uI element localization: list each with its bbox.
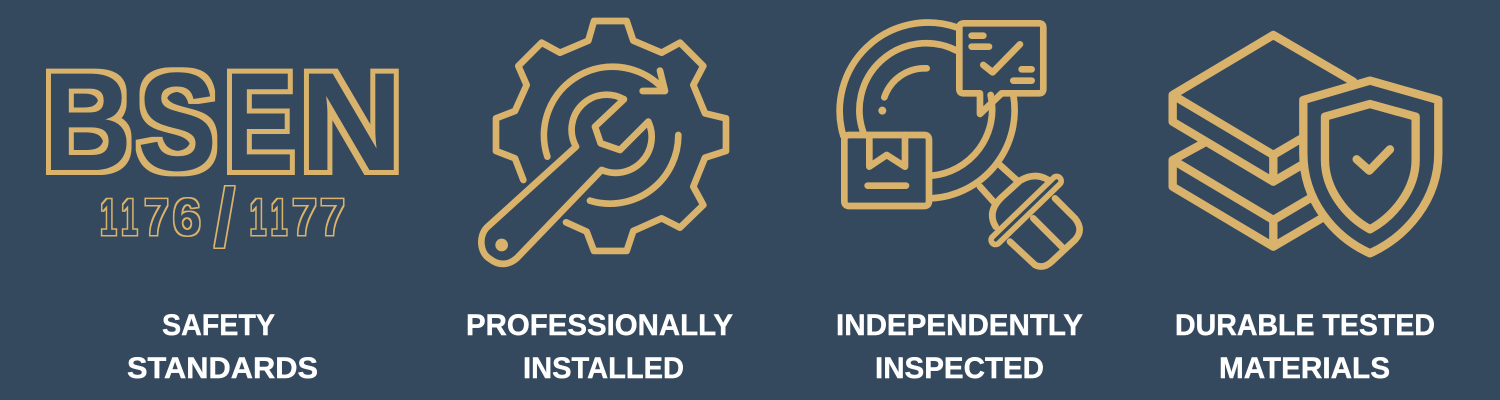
label: safety standards	[127, 309, 318, 385]
heading: BSEN: S	[137, 43, 217, 200]
heading: 1176 / 1177: 7	[320, 189, 345, 247]
top slab	[1173, 35, 1353, 182]
heading: 1176 / 1177: 7	[144, 189, 169, 247]
speech bubble	[959, 23, 1043, 114]
heading: 1176 / 1177: 1	[250, 189, 266, 247]
label: professionally installed: PROFESSIONALLY	[466, 309, 733, 342]
heading: 1176 / 1177: 7	[292, 189, 317, 247]
heading: 1176 / 1177: 1	[122, 189, 138, 247]
magnifier handle	[980, 165, 1080, 267]
label: safety standards: STANDARDS	[127, 352, 318, 385]
box	[844, 135, 929, 206]
label: independently inspected: INDEPENDENTLY	[836, 309, 1083, 342]
label: durable tested materials: DURABLE TESTED	[1175, 309, 1435, 342]
heading: BSEN: E	[225, 43, 294, 200]
heading: 1176 / 1177: /	[214, 173, 235, 264]
label: professionally installed: INSTALLED	[523, 352, 684, 385]
lens rings	[840, 23, 1015, 198]
gear outline	[496, 21, 726, 251]
label: independently inspected: INSPECTED	[875, 352, 1044, 385]
heading: BSEN: N	[299, 43, 404, 200]
wrench hole	[495, 239, 508, 251]
icon: gear and wrench	[481, 21, 726, 264]
lower arc	[590, 135, 678, 204]
label: professionally installed	[466, 309, 733, 385]
shield check	[1357, 149, 1390, 171]
lens dot	[878, 107, 886, 115]
rotation arrow	[544, 67, 665, 157]
checkmark and lines	[972, 36, 1032, 81]
lens highlight	[884, 68, 927, 97]
bottom slab	[1173, 143, 1322, 247]
icon: magnifier with box and speech bubble	[840, 23, 1080, 267]
box ribbon and label	[868, 135, 906, 186]
heading: BSEN: B	[43, 43, 132, 200]
handle collar	[996, 181, 1057, 240]
label: durable tested materials: MATERIALS	[1219, 352, 1390, 385]
heading: 1176 / 1177: 6	[172, 189, 201, 247]
label: independently inspected	[836, 309, 1083, 385]
wrench	[481, 95, 652, 264]
label: safety standards: SAFETY	[162, 309, 275, 342]
shield outer	[1303, 81, 1438, 253]
shield inner	[1325, 104, 1416, 229]
heading: 1176 / 1177: 1	[271, 189, 287, 247]
heading: 1176 / 1177: 1	[100, 189, 116, 247]
icon: stacked slabs and shield	[1173, 35, 1438, 253]
label: durable tested materials	[1175, 309, 1435, 385]
